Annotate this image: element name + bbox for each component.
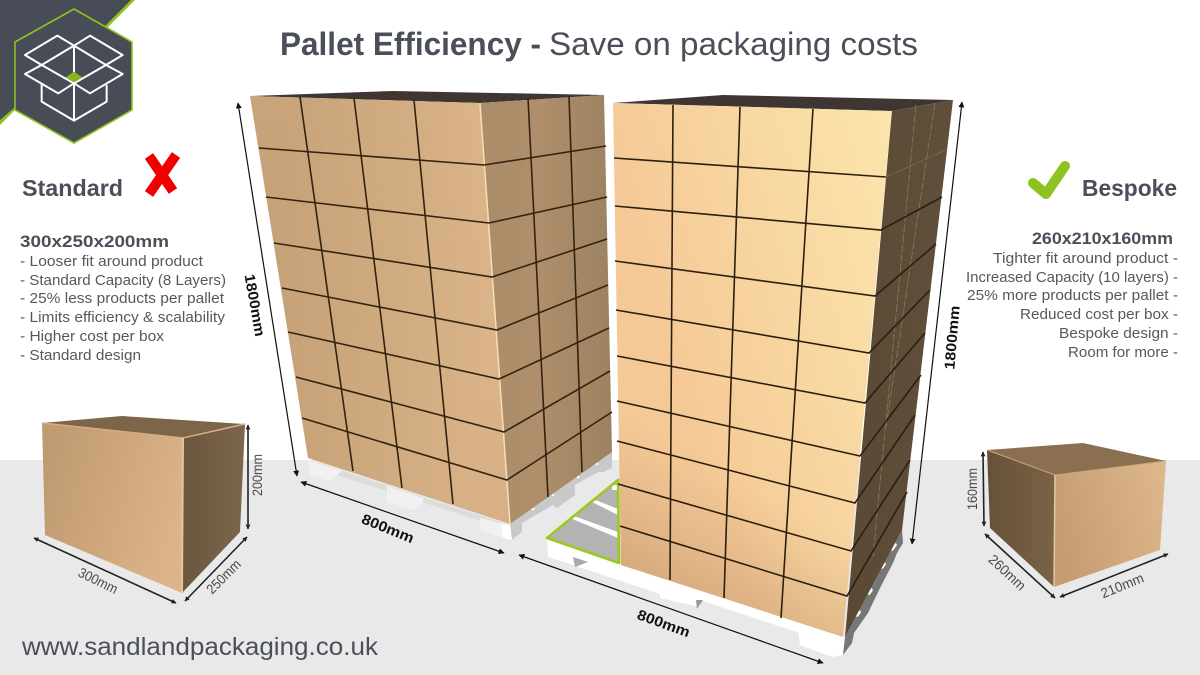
panel: standard text: - 25% less products per pallet xyxy=(20,291,224,307)
standard box dimensions xyxy=(34,425,265,603)
title xyxy=(280,26,918,62)
icon: green tick xyxy=(1033,166,1065,194)
dimension: left stack height xyxy=(238,103,297,476)
right pallet xyxy=(547,480,903,657)
dimension: left stack width xyxy=(301,482,504,553)
panel: bespoke text: Reduced cost per box - xyxy=(1020,307,1178,323)
title: Pallet Efficiency - xyxy=(280,26,541,62)
dimension: right stack width xyxy=(519,555,823,663)
panel: standard text: Standard xyxy=(22,175,123,201)
green highlighted gap xyxy=(547,480,619,563)
panel: bespoke text: Room for more - xyxy=(1068,345,1178,361)
panel: bespoke text: Bespoke xyxy=(1082,175,1177,201)
bespoke box xyxy=(987,443,1166,587)
left pallet xyxy=(308,452,612,540)
panel: standard text: - Looser fit around product xyxy=(20,254,203,270)
panel: standard text: - Standard design xyxy=(20,348,141,364)
panel: bespoke text: 260x210x160mm xyxy=(1032,230,1173,248)
dimension: left stack width: 800mm xyxy=(359,512,416,547)
panel: standard text xyxy=(20,175,226,364)
left stack of boxes xyxy=(250,91,612,524)
panel: bespoke text: 25% more products per pallet - xyxy=(967,288,1178,304)
panel: standard text: - Higher cost per box xyxy=(20,329,165,345)
standard box dimensions: 250mm xyxy=(203,556,244,597)
standard box xyxy=(42,416,245,593)
dimension: right stack width: 800mm xyxy=(635,607,692,641)
website url: www.sandlandpackaging.co.uk xyxy=(21,633,379,661)
standard box dimensions: 300mm xyxy=(76,564,121,597)
bespoke box dimensions: 210mm xyxy=(1098,570,1146,601)
bespoke box dimensions: 160mm xyxy=(964,468,980,510)
dimension: right stack height: 1800mm xyxy=(942,305,964,370)
panel: standard text: 300x250x200mm xyxy=(20,233,169,251)
panel: standard text: - Limits efficiency & scalability xyxy=(20,310,226,326)
bespoke box dimensions: 260mm xyxy=(985,551,1029,594)
panel: bespoke text xyxy=(966,175,1178,361)
panel: bespoke text: Bespoke design - xyxy=(1059,326,1178,342)
panel: bespoke text: Increased Capacity (10 layers) - xyxy=(966,270,1178,286)
right stack of boxes xyxy=(613,95,953,637)
bespoke box dimensions xyxy=(964,452,1168,601)
floor xyxy=(0,460,1200,675)
icon: red cross xyxy=(149,155,176,194)
panel: standard text: - Standard Capacity (8 Layers) xyxy=(20,273,226,289)
logo xyxy=(0,0,135,143)
panel: bespoke text: Tighter fit around product - xyxy=(993,251,1178,267)
standard box dimensions: 200mm xyxy=(249,454,265,496)
dimension: left stack height: 1800mm xyxy=(241,273,267,338)
dimension: right stack height xyxy=(912,102,964,544)
title: Save on packaging costs xyxy=(549,26,918,62)
